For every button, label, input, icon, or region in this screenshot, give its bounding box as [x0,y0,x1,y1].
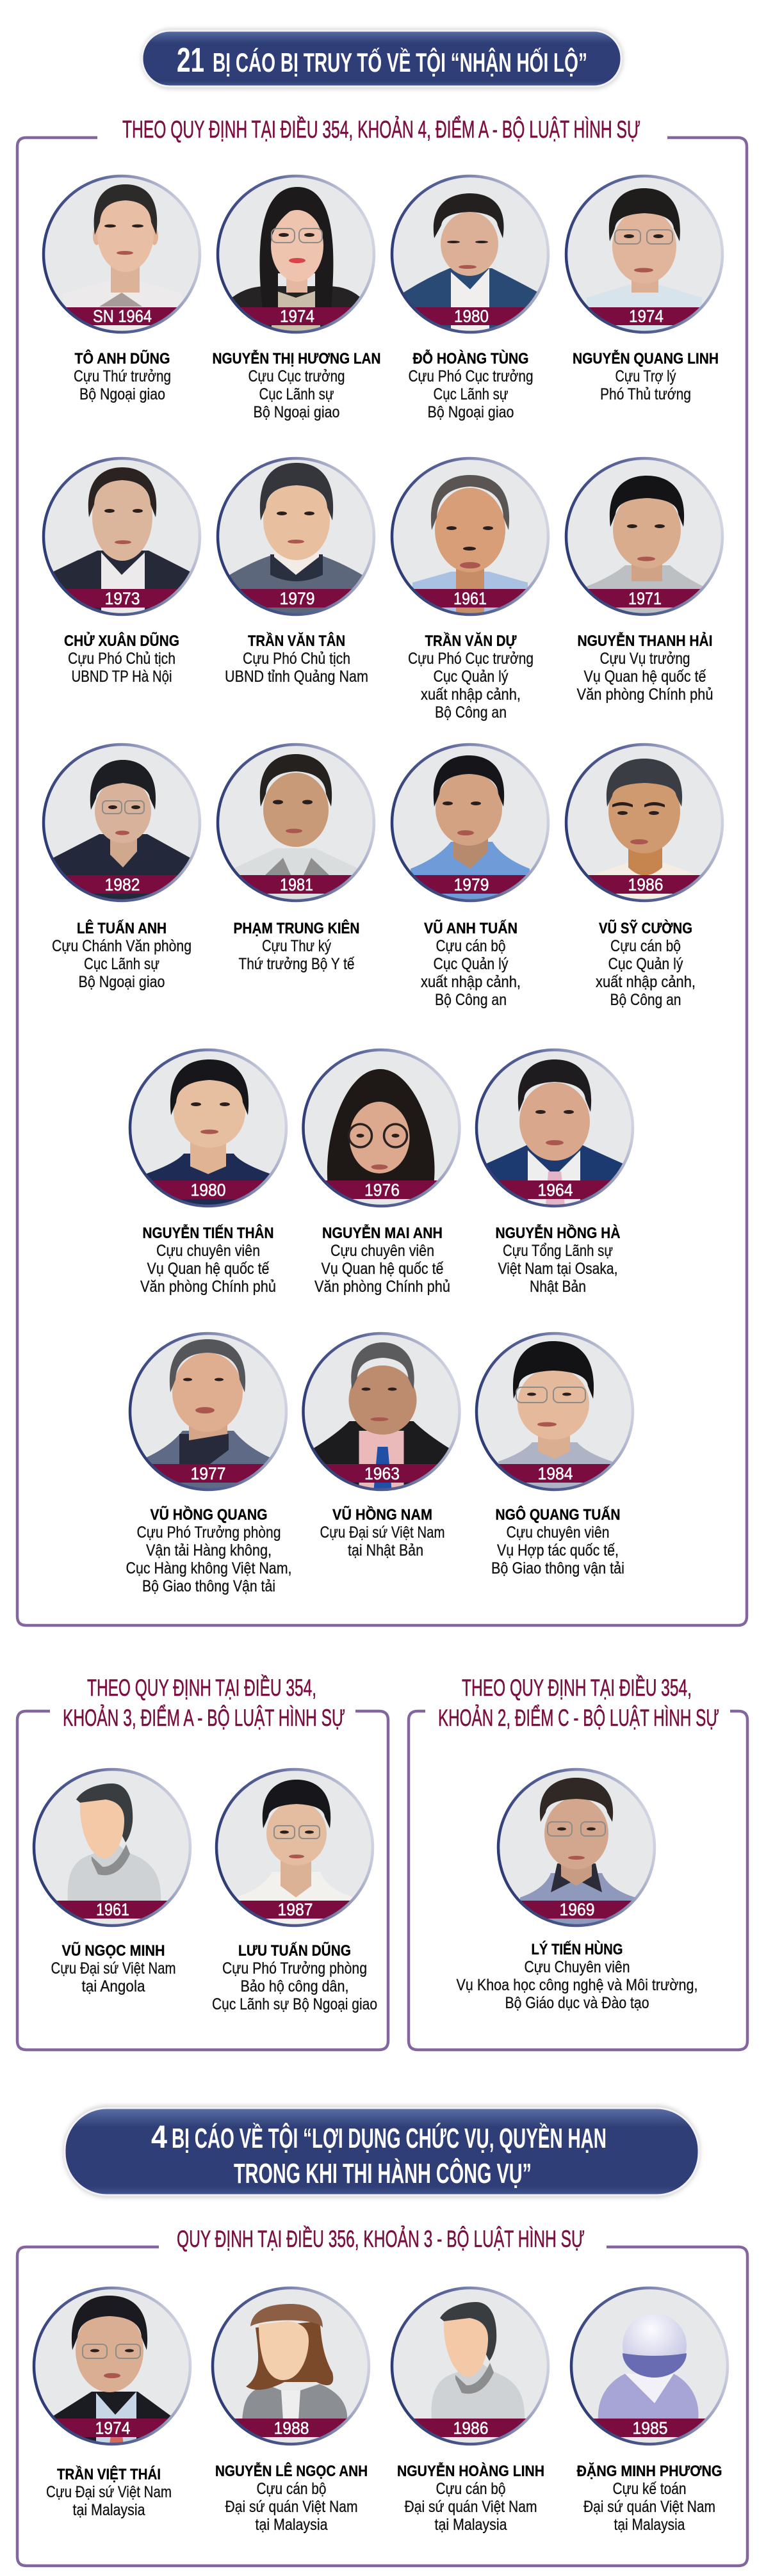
card: Nguyễn Hoàng Linh: Cựu cán bộ [436,2480,506,2498]
card: Vũ Anh Tuấn: VŨ ANH TUẤN [424,919,517,937]
card: Tô Anh Dũng: Cựu Thứ trưởng [74,367,171,385]
card: Trần Văn Tân: Cựu Phó Chủ tịch [243,650,350,668]
card: Nguyễn Hồng Hà: Việt Nam tại Osaka, [498,1260,617,1278]
card: Trần Văn Tân: TRẦN VĂN TÂN [248,632,345,650]
card: Vũ Sỹ Cường: Bộ Công an [610,991,681,1009]
card: Vũ Hồng Quang [126,1333,292,1595]
card: Lê Tuấn Anh [44,745,200,991]
card: Vũ Hồng Quang: Cựu Phó Trưởng phòng [137,1524,281,1542]
card: Lê Tuấn Anh: Bộ Ngoại giao [78,973,165,991]
card: Đặng Minh Phương: ĐẶNG MINH PHƯƠNG [576,2462,722,2480]
card: Vũ Hồng Nam: tại Nhật Bản [348,1542,423,1559]
card: Đặng Minh Phương [571,2288,728,2534]
card: Lưu Tuấn Dũng [212,1769,377,2013]
card: Đặng Minh Phương: Đại sứ quán Việt Nam [583,2498,715,2516]
card: Tô Anh Dũng: TÔ ANH DŨNG [74,350,170,367]
card: Vũ Anh Tuấn: Cựu cán bộ [436,937,506,955]
panel frame: Article 354 clause 4 [17,138,747,1625]
card: Vũ Ngọc Minh: VŨ NGỌC MINH [61,1942,165,1960]
card: Vũ Anh Tuấn: 1979 [453,875,489,894]
card: Lý Tiến Hùng [456,1769,698,2012]
card: Vũ Hồng Nam: VŨ HỒNG NAM [332,1506,432,1524]
card: Nguyễn Tiến Thân [130,1050,286,1296]
card: Vũ Ngọc Minh: tại Angola [82,1977,145,1995]
card: Ngô Quang Tuấn: Bộ Giao thông vận tải [491,1559,624,1577]
card: Ngô Quang Tuấn: NGÔ QUANG TUẤN [496,1506,620,1524]
card: Nguyễn Quang Linh: Cựu Trợ lý [615,367,676,385]
card: Nguyễn Lê Ngọc Anh: tại Malaysia [255,2516,328,2534]
card: Phạm Trung Kiên: Cựu Thư ký [262,937,331,955]
card: Nguyễn Tiến Thân: NGUYỄN TIẾN THÂN [142,1223,274,1242]
card: Ngô Quang Tuấn: Cựu chuyên viên [506,1524,610,1542]
title banner [142,29,623,88]
card: Vũ Hồng Nam: Cựu Đại sứ Việt Nam [320,1524,444,1542]
card: Nguyễn Thanh Hải: 1971 [628,589,662,608]
card: Nguyễn Mai Anh [304,1050,460,1296]
card: Trần Văn Tân [218,458,374,686]
card: Nguyễn Thị Hương Lan: Cục Lãnh sự [259,385,334,403]
card: Nguyễn Thanh Hải: Cựu Vụ trưởng [599,650,690,668]
card: Lê Tuấn Anh: 1982 [105,875,140,894]
card: Đỗ Hoàng Tùng: Cục Lãnh sự [433,385,509,403]
card: Tô Anh Dũng: Bộ Ngoại giao [79,385,165,403]
card: Trần Văn Dự: Cựu Phó Cục trưởng [408,650,534,668]
card: Phạm Trung Kiên: PHẠM TRUNG KIÊN [233,919,360,937]
card: Trần Việt Thái: tại Malaysia [73,2501,145,2519]
card: Đặng Minh Phương: 1985 [633,2419,667,2438]
card: Đỗ Hoàng Tùng: Bộ Ngoại giao [428,403,514,421]
card: Vũ Anh Tuấn: Bộ Công an [435,991,507,1009]
card: Trần Văn Dự [392,458,548,721]
card: Trần Việt Thái: Cựu Đại sứ Việt Nam [46,2483,172,2501]
card: Vũ Sỹ Cường: Cựu cán bộ [610,937,681,955]
card: Lê Tuấn Anh: Cục Lãnh sự [84,955,159,973]
title banner: 21 [177,41,204,79]
card: Lê Tuấn Anh: LÊ TUẤN ANH [77,919,167,937]
card: Nguyễn Quang Linh: NGUYỄN QUANG LINH [573,349,719,367]
card: Vũ Hồng Quang: Vận tải Hàng không, [146,1542,272,1559]
card: Nguyễn Hồng Hà: Nhật Bản [530,1278,586,1296]
card: Nguyễn Lê Ngọc Anh [213,2288,369,2534]
card: Vũ Sỹ Cường: 1986 [628,875,664,894]
card: Trần Văn Tân: UBND tỉnh Quảng Nam [225,668,368,686]
section heading: Article 354 clause 3 [63,1675,345,1731]
card: Lưu Tuấn Dũng: Bảo hộ công dân, [241,1977,348,1995]
second title banner [64,2106,699,2197]
card: Lý Tiến Hùng: Cựu Chuyên viên [524,1958,630,1976]
card: Nguyễn Hoàng Linh: NGUYỄN HOÀNG LINH [397,2461,544,2480]
card: Phạm Trung Kiên: Thứ trưởng Bộ Y tế [238,955,355,973]
card: Nguyễn Hồng Hà: NGUYỄN HỒNG HÀ [496,1223,620,1242]
card: Lý Tiến Hùng: 1969 [560,1900,594,1919]
card: Nguyễn Mai Anh: Văn phòng Chính phủ [314,1278,450,1296]
card: Ngô Quang Tuấn [477,1333,633,1577]
card: Vũ Sỹ Cường: VŨ SỸ CƯỜNG [599,919,692,937]
card: Vũ Sỹ Cường: Cục Quản lý [608,955,683,973]
card: Vũ Hồng Quang: VŨ HỒNG QUANG [150,1506,268,1524]
card: Chử Xuân Dũng: 1973 [105,589,140,608]
card: Nguyễn Tiến Thân: Cựu chuyên viên [156,1242,260,1260]
card: Lý Tiến Hùng: LÝ TIẾN HÙNG [532,1940,623,1958]
card: Nguyễn Thị Hương Lan: NGUYỄN THỊ HƯƠNG LAN [213,349,380,367]
card: Nguyễn Tiến Thân: 1980 [191,1180,225,1200]
card: Nguyễn Quang Linh: 1974 [629,307,664,326]
card: Nguyễn Hoàng Linh [392,2288,548,2534]
card: Nguyễn Mai Anh: 1976 [364,1180,400,1200]
card: Nguyễn Lê Ngọc Anh: 1988 [274,2419,309,2438]
card: Nguyễn Thanh Hải [566,458,722,704]
card: Đỗ Hoàng Tùng: Cựu Phó Cục trưởng [409,367,533,385]
card: Tô Anh Dũng: SN 1964 [93,307,152,326]
card: Vũ Hồng Nam: 1963 [364,1464,400,1483]
card: Vũ Hồng Quang: Cục Hàng không Việt Nam, [126,1559,292,1577]
card: Đỗ Hoàng Tùng: ĐỖ HOÀNG TÙNG [412,349,529,367]
card: Vũ Anh Tuấn: Cục Quản lý [433,955,509,973]
card: Lưu Tuấn Dũng: Cục Lãnh sự Bộ Ngoại giao [212,1995,377,2013]
card: Nguyễn Thị Hương Lan: 1974 [280,307,314,326]
card: Vũ Hồng Quang: Bộ Giao thông Vận tải [142,1577,275,1595]
card: Nguyễn Thanh Hải: Văn phòng Chính phủ [576,686,713,704]
card: Nguyễn Mai Anh: NGUYỄN MAI ANH [322,1223,443,1242]
card: Trần Việt Thái: 1974 [95,2419,131,2438]
panel frame: Article 354 clause 2 [409,1711,747,2050]
card: Ngô Quang Tuấn: Vụ Hợp tác quốc tế, [497,1542,619,1559]
card: Trần Văn Dự: TRẦN VĂN DỰ [425,632,517,650]
card: Vũ Ngọc Minh: Cựu Đại sứ Việt Nam [51,1960,175,1977]
card: Đặng Minh Phương: Cựu kế toán [612,2480,687,2498]
card: Ngô Quang Tuấn: 1984 [538,1464,573,1483]
card: Nguyễn Mai Anh: Cựu chuyên viên [330,1242,434,1260]
card: Nguyễn Thị Hương Lan: Cựu Cục trưởng [249,367,345,385]
card: Lưu Tuấn Dũng: 1987 [278,1900,313,1919]
card: Vũ Ngọc Minh: 1961 [96,1900,129,1919]
card: Trần Việt Thái [34,2288,190,2519]
card: Nguyễn Lê Ngọc Anh: Cựu cán bộ [256,2480,327,2498]
card: Nguyễn Thanh Hải: Vụ Quan hệ quốc tế [584,668,706,686]
card: Nguyễn Thị Hương Lan [213,176,380,421]
card: Nguyễn Hồng Hà [477,1050,633,1296]
card: Trần Văn Dự: Bộ Công an [435,704,507,721]
card: Nguyễn Thị Hương Lan: Bộ Ngoại giao [254,403,339,421]
second title banner: 4 [151,2119,167,2155]
card: Trần Văn Tân: 1979 [279,589,315,608]
card: Nguyễn Mai Anh: Vụ Quan hệ quốc tế [322,1260,444,1278]
card: Lý Tiến Hùng: Vụ Khoa học công nghệ và Môi trường, [456,1976,698,1994]
card: Vũ Hồng Nam [304,1333,460,1559]
card: Đặng Minh Phương: tại Malaysia [614,2516,685,2534]
card: Vũ Anh Tuấn [392,745,548,1009]
card: Lưu Tuấn Dũng: LƯU TUẤN DŨNG [238,1942,351,1960]
card: Phạm Trung Kiên [218,745,374,973]
card: Chử Xuân Dũng: Cựu Phó Chủ tịch [68,650,175,668]
section heading: Article 354 clause 2 [438,1675,719,1731]
panel frame: Article 356 [17,2247,747,2566]
card: Trần Văn Dự: Cục Quản lý [433,668,509,686]
card: Lưu Tuấn Dũng: Cựu Phó Trưởng phòng [222,1960,367,1977]
card: Nguyễn Hoàng Linh: tại Malaysia [434,2516,507,2534]
panel frame: Article 354 clause 3 [17,1711,388,2050]
card: Nguyễn Quang Linh: Phó Thủ tướng [600,385,691,403]
card: Đỗ Hoàng Tùng: 1980 [454,307,489,326]
card: Nguyễn Hồng Hà: Cựu Tổng Lãnh sự [503,1242,613,1260]
card: Vũ Sỹ Cường: xuất nhập cảnh, [596,973,696,991]
card: Lý Tiến Hùng: Bộ Giáo dục và Đào tạo [505,1994,649,2012]
title banner: BỊ CÁO BỊ TRUY TỐ VỀ TỘI “NHẬN HỐI LỘ” [213,47,587,77]
card: Vũ Anh Tuấn: xuất nhập cảnh, [421,973,521,991]
card: Phạm Trung Kiên: 1981 [280,875,313,894]
card: Nguyễn Hoàng Linh: 1986 [453,2419,488,2438]
card: Nguyễn Hồng Hà: 1964 [538,1180,573,1200]
card: Trần Văn Dự: xuất nhập cảnh, [421,686,521,704]
section heading: Article 354 clause 3: THEO QUY ĐỊNH TẠI ĐIỀU 354, [87,1675,316,1701]
card: Chử Xuân Dũng: CHỬ XUÂN DŨNG [64,631,179,650]
card: Nguyễn Lê Ngọc Anh: Đại sứ quán Việt Nam [225,2498,357,2516]
second title banner: TRONG KHI THI HÀNH CÔNG VỤ” [234,2157,532,2189]
card: Nguyễn Thanh Hải: NGUYỄN THANH HẢI [578,631,712,650]
card: Trần Việt Thái: TRẦN VIỆT THÁI [57,2465,161,2483]
card: Lê Tuấn Anh: Cựu Chánh Văn phòng [52,937,192,955]
card: Nguyễn Tiến Thân: Văn phòng Chính phủ [140,1278,276,1296]
card: Nguyễn Hoàng Linh: Đại sứ quán Việt Nam [405,2498,537,2516]
card: Vũ Ngọc Minh [34,1769,190,1995]
card: Trần Văn Dự: 1961 [453,589,487,608]
card: Vũ Hồng Quang: 1977 [191,1464,225,1483]
card: Nguyễn Tiến Thân: Vụ Quan hệ quốc tế [147,1260,270,1278]
card: Vũ Sỹ Cường [566,745,722,1009]
section heading: Article 354 clause 3: KHOẢN 3, ĐIỂM A - BỘ LUẬT HÌNH SỰ [63,1704,345,1731]
card: Chử Xuân Dũng: UBND TP Hà Nội [72,668,172,686]
card: Nguyễn Quang Linh [566,176,722,403]
card: Chử Xuân Dũng [44,458,200,686]
card: Tô Anh Dũng [44,176,200,403]
card: Đỗ Hoàng Tùng [392,176,548,421]
card: Nguyễn Lê Ngọc Anh: NGUYỄN LÊ NGỌC ANH [215,2461,368,2480]
